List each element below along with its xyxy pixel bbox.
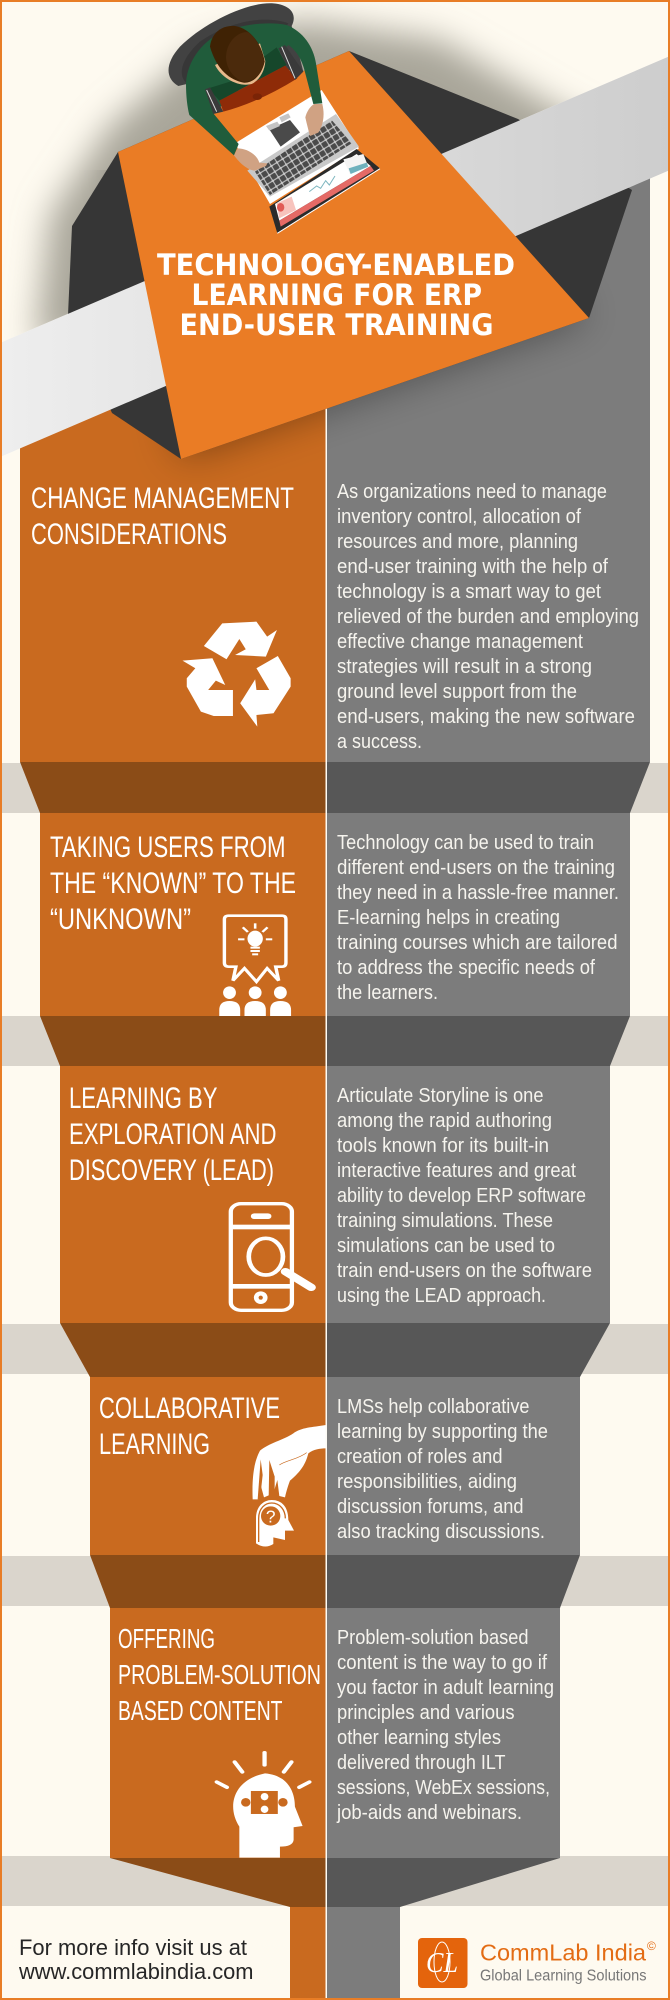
text block: section 5 body: content is the way to go if <box>337 1651 547 1674</box>
text block: section 5 body: job-aids and webinars. <box>336 1801 522 1824</box>
text block: section 3 body: train end-users on the software <box>337 1259 592 1282</box>
text block: section 4 body: also tracking discussions. <box>337 1520 545 1543</box>
logo: CommLab India <box>418 1938 656 1988</box>
text block: section 2 body: the learners. <box>337 981 438 1004</box>
text block: section 1 body: inventory control, allocation of <box>337 505 581 528</box>
icon: idea presentation with audience <box>219 916 291 1016</box>
heading: section 3: LEARNING BY <box>69 1082 218 1115</box>
title <box>157 248 515 342</box>
text block: section 1 body: end-user training with the help of <box>337 555 608 578</box>
section 2: known to unknown <box>40 813 630 1016</box>
text block: section 1 body: effective change management <box>337 630 583 653</box>
white centre divider <box>326 400 327 1998</box>
text block: section 5 body: principles and various <box>337 1701 514 1724</box>
title: END-USER TRAINING <box>180 308 494 342</box>
funnel: section 3 to 4 <box>60 1323 610 1377</box>
text block: section 4 body: discussion forums, and <box>337 1495 524 1518</box>
stem <box>290 1907 400 1998</box>
sweater and torso <box>186 23 322 155</box>
text block: section 3 body: ability to develop ERP software <box>337 1184 586 1207</box>
text block: section 3 body: tools known for its built-in <box>337 1134 549 1157</box>
text block: section 3 body: using the LEAD approach. <box>337 1284 546 1307</box>
panel: section 1 orange <box>20 390 326 762</box>
heading: section 1: CONSIDERATIONS <box>31 518 227 551</box>
icon: hand holding head with question mark: ? <box>266 1506 275 1526</box>
text block: section 4 body <box>337 1395 548 1543</box>
heading: section 4: LEARNING <box>99 1428 210 1461</box>
text block: section 5 body: you factor in adult learning <box>337 1676 554 1699</box>
panel: section 1 grey <box>327 170 650 762</box>
text block: section 1 body: resources and more, planning <box>337 530 578 553</box>
text block: section 3 body: Articulate Storyline is one <box>337 1084 544 1107</box>
text block: section 3 body: interactive features and great <box>337 1159 576 1182</box>
icon: recycle <box>182 622 291 727</box>
heading: section 3: EXPLORATION AND <box>69 1118 276 1151</box>
head <box>210 26 265 85</box>
text block: section 1 body: As organizations need to manage <box>337 480 607 503</box>
heading: section 3: DISCOVERY (LEAD) <box>69 1154 274 1187</box>
text block: section 1 body: technology is a smart way to get <box>337 580 601 603</box>
panel: section 5 orange <box>110 1608 326 1858</box>
text block: section 3 body: simulations can be used to <box>337 1234 555 1257</box>
title: TECHNOLOGY-ENABLED <box>157 248 515 282</box>
funnel: section 4 to 5 <box>90 1555 580 1608</box>
panel: section 2 orange <box>40 813 326 1016</box>
text block: section 2 body: Technology can be used to train <box>337 831 594 854</box>
text block: section 4 body: responsibilities, aiding <box>337 1470 517 1493</box>
section 5: problem-solution content <box>110 1608 560 1858</box>
panel: section 3 orange <box>60 1066 326 1323</box>
text block: section 1 body <box>337 480 639 753</box>
text block: section 3 body: training simulations. These <box>337 1209 553 1232</box>
text block: section 1 body: end-users, making the new software <box>337 705 635 728</box>
heading: section 3 <box>69 1082 276 1187</box>
text block: section 2 body: E-learning helps in creating <box>337 906 560 929</box>
text block: section 5 body: Problem-solution based <box>337 1626 528 1649</box>
heading: section 4 <box>99 1392 280 1461</box>
heading: section 5: OFFERING <box>118 1623 215 1654</box>
desk legs (dark) <box>68 51 632 459</box>
text block: section 1 body: strategies will result in a strong <box>337 655 592 678</box>
desk top <box>118 51 589 459</box>
footer: website call to action: For more info visit us at <box>19 1935 247 1960</box>
text block: section 2 body: training courses which are tailored <box>337 931 618 954</box>
text block: section 4 body: learning by supporting the <box>337 1420 548 1443</box>
text block: section 2 body: they need in a hassle-free manner. <box>337 881 619 904</box>
section 1: change management <box>20 170 650 762</box>
text block: section 5 body: sessions, WebEx sessions, <box>337 1776 550 1799</box>
text block: section 2 body: to address the specific needs of <box>337 956 595 979</box>
hands <box>234 104 324 171</box>
text block: section 2 body <box>337 831 619 1004</box>
footer: website call to action <box>18 1935 253 1984</box>
panel: section 4 grey <box>327 1377 580 1555</box>
funnel: section 5 into stem <box>110 1858 560 1907</box>
heading: section 2: THE “KNOWN” TO THE <box>50 867 296 900</box>
text block: section 5 body: other learning styles <box>337 1726 501 1749</box>
heading: section 5: BASED CONTENT <box>118 1695 283 1726</box>
text block: section 2 body: different end-users on the training <box>337 856 615 879</box>
text block: section 3 body <box>337 1084 592 1307</box>
text block: section 5 body: delivered through ILT <box>337 1751 506 1774</box>
text block: section 3 body: among the rapid authoring <box>337 1109 552 1132</box>
heading: section 1 <box>31 482 294 551</box>
heading: section 2: TAKING USERS FROM <box>50 831 286 864</box>
illustration: person at laptop <box>169 3 380 233</box>
heading: section 2 <box>50 831 296 936</box>
heading: section 5: PROBLEM-SOLUTION <box>118 1659 321 1690</box>
text block: section 4 body: creation of roles and <box>337 1445 502 1468</box>
text block: section 1 body: ground level support from the <box>337 680 577 703</box>
copyright mark: © <box>647 1939 656 1953</box>
title: LEARNING FOR ERP <box>192 278 482 312</box>
logo wordmark: CommLab India <box>480 1940 646 1966</box>
panel: section 4 orange <box>90 1377 326 1555</box>
text block: section 5 body <box>336 1626 554 1824</box>
heading: section 1: CHANGE MANAGEMENT <box>31 482 294 515</box>
soft shadow behind desk <box>35 20 620 345</box>
funnel: section 2 to 3 <box>40 1016 630 1066</box>
funnel: section 1 to 2 <box>20 762 650 813</box>
laptop <box>235 90 380 233</box>
section 3: exploration and discovery <box>60 1066 610 1323</box>
panel: section 2 grey <box>327 813 630 1016</box>
icon: head with puzzle piece <box>217 1753 309 1858</box>
heading: section 5 <box>118 1623 321 1726</box>
heading: section 4: COLLABORATIVE <box>99 1392 280 1425</box>
logo tagline: Global Learning Solutions <box>480 1968 647 1984</box>
text block: section 1 body: relieved of the burden and employing <box>337 605 639 628</box>
text block: section 1 body: a success. <box>337 730 422 753</box>
icon: phone with magnifier <box>231 1204 311 1310</box>
panel: section 3 grey <box>327 1066 610 1323</box>
footer: website call to action: www.commlabindia.com <box>18 1959 253 1984</box>
chair back <box>169 3 303 86</box>
panel: section 5 grey <box>327 1608 560 1858</box>
desk cast shadow on panels <box>102 170 588 473</box>
beige horizontal bands <box>2 763 668 1906</box>
heading: section 2: “UNKNOWN” <box>50 903 191 936</box>
diagonal wall band <box>0 56 670 457</box>
logo mark: CL <box>426 1948 458 1979</box>
logo mark <box>418 1938 468 1988</box>
section 4: collaborative learning <box>90 1377 580 1555</box>
icon: hand holding head with question mark <box>252 1425 326 1546</box>
text block: section 4 body: LMSs help collaborative <box>337 1395 530 1418</box>
